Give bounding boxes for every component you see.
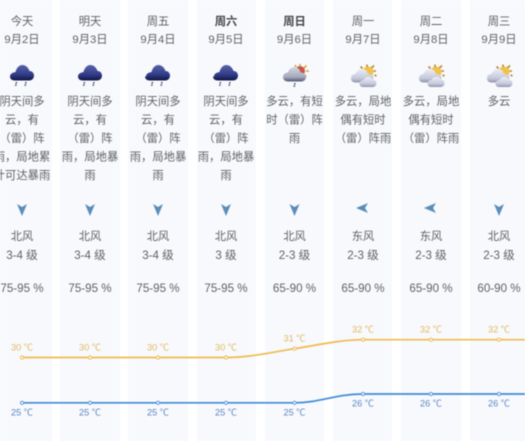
panel: day 4: 雨，局地暴: [198, 150, 254, 164]
panel: day 4: 周六: [215, 14, 237, 28]
panel: day 8: 9月9日: [481, 34, 517, 46]
icon: east wind arrow: [356, 203, 368, 213]
panel: day 1 today: [0, 14, 50, 295]
icon: sun with shower cloud: [283, 64, 309, 88]
icon: north wind arrow: [221, 204, 231, 216]
panel: day 3: 云，有: [141, 112, 175, 126]
line chart: high temperature: 30 ℃: [11, 342, 33, 352]
line chart: low temperature: 26 ℃: [352, 398, 374, 408]
panel: day 2: 云，有: [73, 112, 107, 126]
panel: day 3: （雷）阵: [135, 131, 181, 145]
icon: partly cloudy: [351, 64, 376, 87]
panel: day 6: 东风: [352, 230, 374, 243]
panel: day 8: 多云: [488, 94, 510, 108]
panel: day 3: 周五: [147, 15, 169, 28]
panel: day 4: 75-95 %: [204, 282, 248, 295]
panel: day 8: 2-3 级: [483, 249, 515, 262]
panel: day 3: 3-4 级: [142, 249, 174, 262]
icon: rain cloud: [145, 65, 170, 86]
panel: day 1 today: 9月2日: [4, 34, 40, 46]
icon: north wind arrow: [494, 204, 504, 216]
panel: day 5: 9月6日: [277, 34, 312, 46]
line chart: low temperature: 25 ℃: [284, 408, 305, 418]
icon: rain cloud: [78, 65, 102, 86]
panel: day 5: 65-90 %: [273, 282, 316, 295]
panel: day 5: [266, 15, 323, 295]
line chart: low temperature: 25 ℃: [11, 408, 33, 418]
panel: day 5: 2-3 级: [279, 249, 311, 262]
panel: day 6: 65-90 %: [341, 282, 385, 295]
panel: day 7: 偶有短时: [408, 112, 454, 126]
panel: day 2: 雨，局地暴: [62, 150, 118, 164]
line chart: high temperature: 32 ℃: [420, 324, 442, 334]
panel: day 8: 北风: [488, 230, 510, 243]
panel: day 1 today: 75-95 %: [0, 282, 44, 295]
panel: day 4: 3 级: [215, 249, 237, 262]
panel: day 2: 3-4 级: [74, 249, 106, 262]
panel: day 4: 阴天间多: [203, 94, 249, 108]
panel: day 8: 60-90 %: [477, 282, 521, 295]
panel: day 2: 北风: [79, 230, 101, 243]
panel: day 4: 北风: [215, 230, 237, 243]
panel: day 7: 9月8日: [413, 34, 449, 46]
panel: day 6: 9月7日: [345, 34, 381, 46]
panel: day 2: [62, 15, 118, 295]
panel: day 6: 多云，局地: [335, 94, 391, 108]
line chart: high temperature: 32 ℃: [352, 324, 374, 334]
icon: partly cloudy: [487, 64, 512, 87]
panel: day 8: 周三: [488, 15, 510, 28]
panel: day 7: [403, 15, 459, 295]
icon: north wind arrow: [85, 204, 95, 216]
panel: day 8: [477, 15, 521, 295]
panel: day 5: 雨: [289, 133, 300, 145]
panel: day 3: 北风: [147, 230, 169, 243]
line chart: high temperature: 30 ℃: [215, 342, 237, 352]
icon: north wind arrow: [17, 204, 27, 216]
line chart: high temperature: 31 ℃: [284, 334, 305, 344]
line chart: low temperature: 26 ℃: [420, 398, 442, 408]
line chart: low temperature: 25 ℃: [215, 408, 237, 418]
panel: day 3: 阴天间多: [135, 94, 181, 108]
panel: day 1 today: （雷）阵: [0, 131, 45, 145]
panel: day 2: 阴天间多: [67, 94, 113, 108]
line chart: low temperature: 26 ℃: [488, 398, 510, 408]
panel: day 6: 周一: [352, 15, 374, 28]
panel: day 7: 周二: [420, 15, 442, 28]
line chart: high temperature: 30 ℃: [79, 342, 101, 352]
panel: day 6: 偶有短时: [340, 112, 386, 126]
icon: north wind arrow: [290, 204, 300, 216]
panel: day 7: 2-3 级: [415, 249, 447, 262]
panel: day 4: 9月5日: [208, 34, 244, 46]
panel: day 3: 9月4日: [140, 34, 176, 46]
panel: day 2: 明天: [79, 15, 101, 28]
panel: day 4: 云，有: [209, 112, 243, 126]
line chart: low temperature: 25 ℃: [79, 408, 101, 418]
line chart: high temperature: [11, 324, 525, 359]
panel: day 4: 雨: [220, 170, 232, 182]
line chart: high temperature: 30 ℃: [147, 342, 169, 352]
panel: day 7: 65-90 %: [409, 282, 453, 295]
panel: day 6: （雷）阵雨: [335, 131, 391, 145]
panel: day 2: （雷）阵: [67, 131, 113, 145]
panel: day 2: 雨: [84, 170, 96, 182]
panel: day 6: [335, 15, 391, 295]
panel: day 3: 雨: [152, 170, 164, 182]
panel: day 4: [198, 14, 254, 295]
panel: day 1 today: 北风: [11, 230, 33, 243]
panel: day 5: 多云，有短: [266, 94, 323, 108]
panel: day 4: （雷）阵: [203, 131, 249, 145]
line chart: low temperature: [11, 392, 525, 418]
panel: day 3: 雨，局地暴: [130, 150, 186, 164]
icon: rain cloud: [10, 65, 34, 86]
icon: north wind arrow: [153, 204, 163, 216]
panel: day 5: 北风: [283, 230, 306, 243]
panel: day 2: 9月3日: [72, 34, 108, 46]
panel: day 5: 周日: [283, 15, 306, 28]
line chart: low temperature: 25 ℃: [147, 408, 169, 418]
panel: day 3: [130, 15, 186, 295]
panel: day 1 today: 3-4 级: [6, 249, 38, 262]
panel: day 3: 75-95 %: [136, 282, 180, 295]
panel: day 5: 时（雷）阵: [266, 112, 323, 126]
panel: day 2: 75-95 %: [68, 282, 112, 295]
icon: rain cloud: [213, 65, 238, 86]
panel: day 1 today: 今天: [11, 14, 33, 28]
line chart: high temperature: 32 ℃: [488, 324, 510, 334]
panel: day 6: 2-3 级: [347, 249, 379, 262]
panel: day 1 today: 阴天间多: [0, 94, 45, 108]
panel: day 7: 东风: [420, 230, 442, 243]
icon: partly cloudy: [419, 64, 444, 87]
panel: day 7: 多云，局地: [403, 94, 459, 108]
panel: day 7: （雷）阵雨: [403, 131, 459, 145]
panel: day 1 today: 云，有: [5, 112, 39, 126]
icon: east wind arrow: [424, 203, 436, 213]
